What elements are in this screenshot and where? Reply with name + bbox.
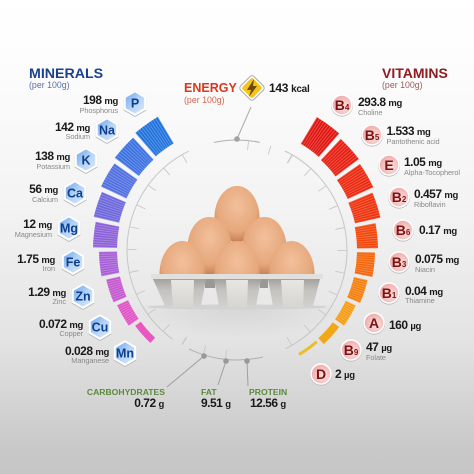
mineral: manganese: Manganese — [71, 356, 109, 365]
mineral: calcium: Ca — [67, 186, 84, 200]
energy connector — [234, 107, 251, 142]
mineral: sodium: 142 mg — [55, 120, 90, 134]
minerals bar chart — [40, 53, 434, 447]
vitamin: B1 — [378, 282, 443, 305]
mineral: copper: 0.072 mg — [39, 317, 83, 331]
vitamin: E: Alpha-Tocopherol — [404, 168, 460, 177]
title: minerals — [29, 66, 103, 90]
carbohydrates: CARBOHYDRATES — [87, 387, 165, 397]
title: vitamins — [382, 65, 448, 90]
title: minerals: MINERALS — [29, 66, 103, 82]
fat: FAT — [201, 387, 217, 397]
vitamin: B5: B5 — [365, 127, 380, 143]
mineral: zinc: Zinc — [52, 297, 66, 306]
mineral: magnesium: Magnesium — [15, 230, 52, 239]
vitamin: B1: 0.04 mg — [405, 284, 443, 298]
energy value: 143 kcal — [269, 81, 310, 95]
mineral: magnesium: Mg — [60, 222, 78, 236]
energy heading: ENERGY — [184, 81, 237, 95]
mineral: phosphorus: P — [131, 96, 139, 110]
vitamin: A: 160 µg — [389, 318, 422, 332]
vitamin: B6: B6 — [396, 222, 411, 238]
vitamin: E: 1.05 mg — [404, 155, 442, 169]
mineral: phosphorus: 198 mg — [83, 93, 118, 107]
mineral: sodium: Sodium — [66, 132, 90, 141]
eggs — [160, 186, 314, 299]
vitamin: B9: 47 µg — [366, 340, 392, 354]
egg tray — [147, 274, 327, 310]
vitamin: D: D — [316, 366, 326, 382]
mineral: potassium: Potassium — [36, 162, 70, 171]
mineral: potassium: K — [81, 154, 91, 168]
mineral: phosphorus — [80, 90, 146, 117]
mineral: calcium: Calcium — [32, 195, 58, 204]
gauge ring with ticks — [83, 96, 391, 404]
mineral: magnesium — [15, 215, 80, 242]
fat: 9.51 g — [201, 396, 231, 410]
vitamin: B9: Folate — [366, 353, 386, 362]
vitamin: B2 — [388, 186, 459, 209]
vitamin: B2: 0.457 mg — [414, 187, 459, 201]
vitamin: B3: Niacin — [415, 265, 435, 274]
vitamin: B6 — [392, 219, 457, 242]
mineral: sodium: Na — [99, 124, 116, 138]
mineral: magnesium: 12 mg — [23, 217, 52, 231]
vitamin: A — [363, 312, 422, 335]
mineral: potassium — [35, 147, 97, 174]
vitamin: D: 2 µg — [335, 367, 355, 381]
vitamin: B2: Riboflavin — [414, 200, 445, 209]
vitamin: D — [310, 363, 355, 386]
mineral: iron: 1.75 mg — [17, 252, 55, 266]
title: vitamins: VITAMINS — [382, 65, 448, 81]
vitamin: B3: 0.075 mg — [415, 252, 460, 266]
vitamin: A: A — [369, 315, 379, 331]
carbohydrates: 0.72 g — [134, 396, 164, 410]
vitamin: B3 — [388, 251, 460, 274]
vitamin: B5 — [361, 124, 440, 147]
protein — [244, 358, 287, 410]
mineral: zinc: Zn — [75, 290, 91, 304]
mineral: iron — [17, 249, 84, 276]
carbohydrates — [87, 353, 207, 410]
mineral: iron: Fe — [66, 256, 80, 270]
mineral: sodium — [55, 117, 118, 144]
mineral: manganese: Mn — [116, 346, 134, 360]
mineral: iron: Iron — [43, 264, 55, 273]
mineral: zinc — [28, 283, 94, 310]
mineral: potassium: 138 mg — [35, 149, 70, 163]
protein: PROTEIN — [249, 387, 287, 397]
mineral: manganese: 0.028 mg — [65, 344, 109, 358]
vitamin: B4 — [331, 94, 403, 117]
floor shade — [127, 305, 347, 339]
vitamin: B9: B9 — [344, 342, 359, 358]
vitamin: B5: Pantothenic acid — [386, 137, 440, 146]
mineral: zinc: 1.29 mg — [28, 285, 66, 299]
vitamin: B4: B4 — [335, 97, 350, 113]
mineral: copper: Copper — [59, 329, 84, 338]
vitamin: B4: 293.8 mg — [358, 95, 403, 109]
mineral: manganese — [65, 340, 136, 367]
vitamin: B1: B1 — [382, 285, 397, 301]
vitamin: B2: B2 — [392, 189, 407, 205]
vitamin: B6: 0.17 mg — [419, 223, 457, 237]
title: vitamins: (per 100g) — [382, 80, 423, 90]
vitamin: B3: B3 — [392, 254, 407, 270]
mineral: copper: Cu — [92, 320, 108, 334]
fat — [201, 358, 231, 410]
mineral: calcium: 56 mg — [29, 182, 58, 196]
vitamin: B5: 1.533 mg — [386, 124, 431, 138]
title: minerals: (per 100g) — [29, 80, 70, 90]
vitamin: E — [378, 154, 460, 177]
vitamins bar chart — [43, 56, 431, 444]
vitamin: B9 — [340, 339, 392, 362]
vitamin: B1: Thiamine — [405, 296, 435, 305]
mineral: copper — [39, 314, 111, 341]
vitamin: E: E — [384, 157, 394, 173]
energy heading — [184, 81, 237, 105]
mineral: calcium — [29, 180, 86, 207]
icon: energy bolt — [239, 75, 265, 101]
energy heading: (per 100g) — [184, 95, 225, 105]
mineral: phosphorus: Phosphorus — [80, 106, 118, 115]
vitamin: B4: Choline — [358, 108, 382, 117]
protein: 12.56 g — [250, 396, 286, 410]
